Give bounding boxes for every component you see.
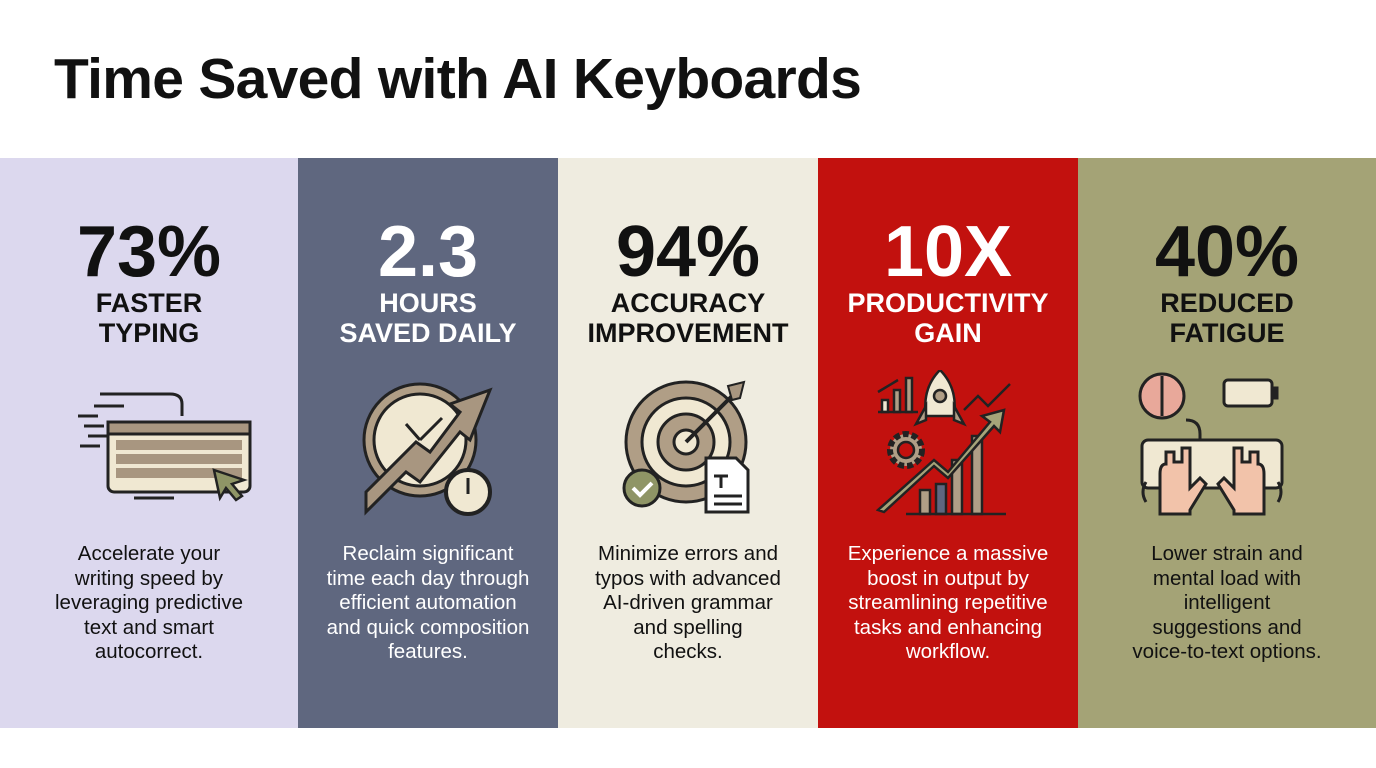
label: hours saved daily: SAVED DAILY (339, 318, 517, 348)
stat: 73%: 73% (77, 212, 221, 292)
label: reduced fatigue (1160, 288, 1294, 348)
stat: 2.3: 2.3 (378, 212, 478, 292)
description: suggestions and (1152, 616, 1302, 638)
panel: hours saved (298, 158, 558, 728)
description: features. (388, 640, 468, 663)
label: accuracy improvement: ACCURACY (611, 288, 765, 318)
stat: 40%: 40% (1155, 212, 1299, 292)
description: workflow. (906, 640, 990, 663)
icon: brain, battery, hands on keyboard (1138, 372, 1284, 516)
description: AI-driven grammar (603, 591, 773, 614)
label: faster typing: FASTER (96, 288, 202, 318)
label: hours saved daily: HOURS (379, 288, 477, 318)
description: and quick composition (327, 616, 529, 638)
panel: productivity (818, 158, 1078, 728)
description: autocorrect. (95, 640, 203, 663)
description: Lower strain and (1151, 542, 1303, 565)
description: boost in output by (867, 566, 1029, 590)
description (55, 542, 243, 663)
description (326, 542, 529, 663)
description: leveraging predictive (55, 591, 243, 614)
title: Time Saved with AI Keyboards (54, 47, 861, 111)
description: streamlining repetitive (848, 591, 1048, 614)
label: productivity gain: PRODUCTIVITY (847, 288, 1048, 318)
description: Accelerate your (78, 542, 220, 565)
icon: keyboard with cursor (78, 392, 252, 502)
label: hours saved daily (339, 288, 517, 348)
description: time each day through (327, 566, 529, 590)
label: productivity gain (847, 288, 1048, 348)
description: checks. (653, 640, 723, 663)
description: Reclaim significant (343, 542, 513, 565)
panel: faster typing (0, 158, 298, 728)
description: Minimize errors and (598, 542, 778, 565)
description (595, 542, 781, 663)
description: efficient automation (339, 591, 517, 614)
label: reduced fatigue: REDUCED (1160, 288, 1294, 318)
description: text and smart (84, 616, 214, 638)
panel: accuracy (558, 158, 818, 728)
label: productivity gain: GAIN (914, 318, 982, 348)
icon: clock with arrow (362, 382, 492, 516)
description: intelligent (1184, 591, 1270, 614)
description: voice-to-text options. (1132, 640, 1322, 663)
description: typos with advanced (595, 566, 781, 590)
description: writing speed by (75, 566, 223, 590)
label: faster typing: TYPING (99, 318, 199, 348)
description (1132, 542, 1322, 663)
label: faster typing (96, 288, 202, 348)
label: reduced fatigue: FATIGUE (1169, 318, 1284, 348)
icon: rocket and growth chart (876, 370, 1011, 516)
description: tasks and enhancing (854, 616, 1042, 638)
panel: reduced fatigue (1078, 158, 1376, 728)
description (848, 542, 1048, 663)
label: accuracy improvement: IMPROVEMENT (587, 318, 788, 348)
description: Experience a massive (848, 542, 1048, 565)
description: mental load with (1153, 566, 1301, 590)
description: and spelling (633, 616, 743, 638)
icon: target with document (622, 380, 750, 514)
label: accuracy improvement (587, 288, 788, 348)
stat: 94%: 94% (616, 212, 760, 292)
stat: 10X: 10X (884, 212, 1012, 292)
